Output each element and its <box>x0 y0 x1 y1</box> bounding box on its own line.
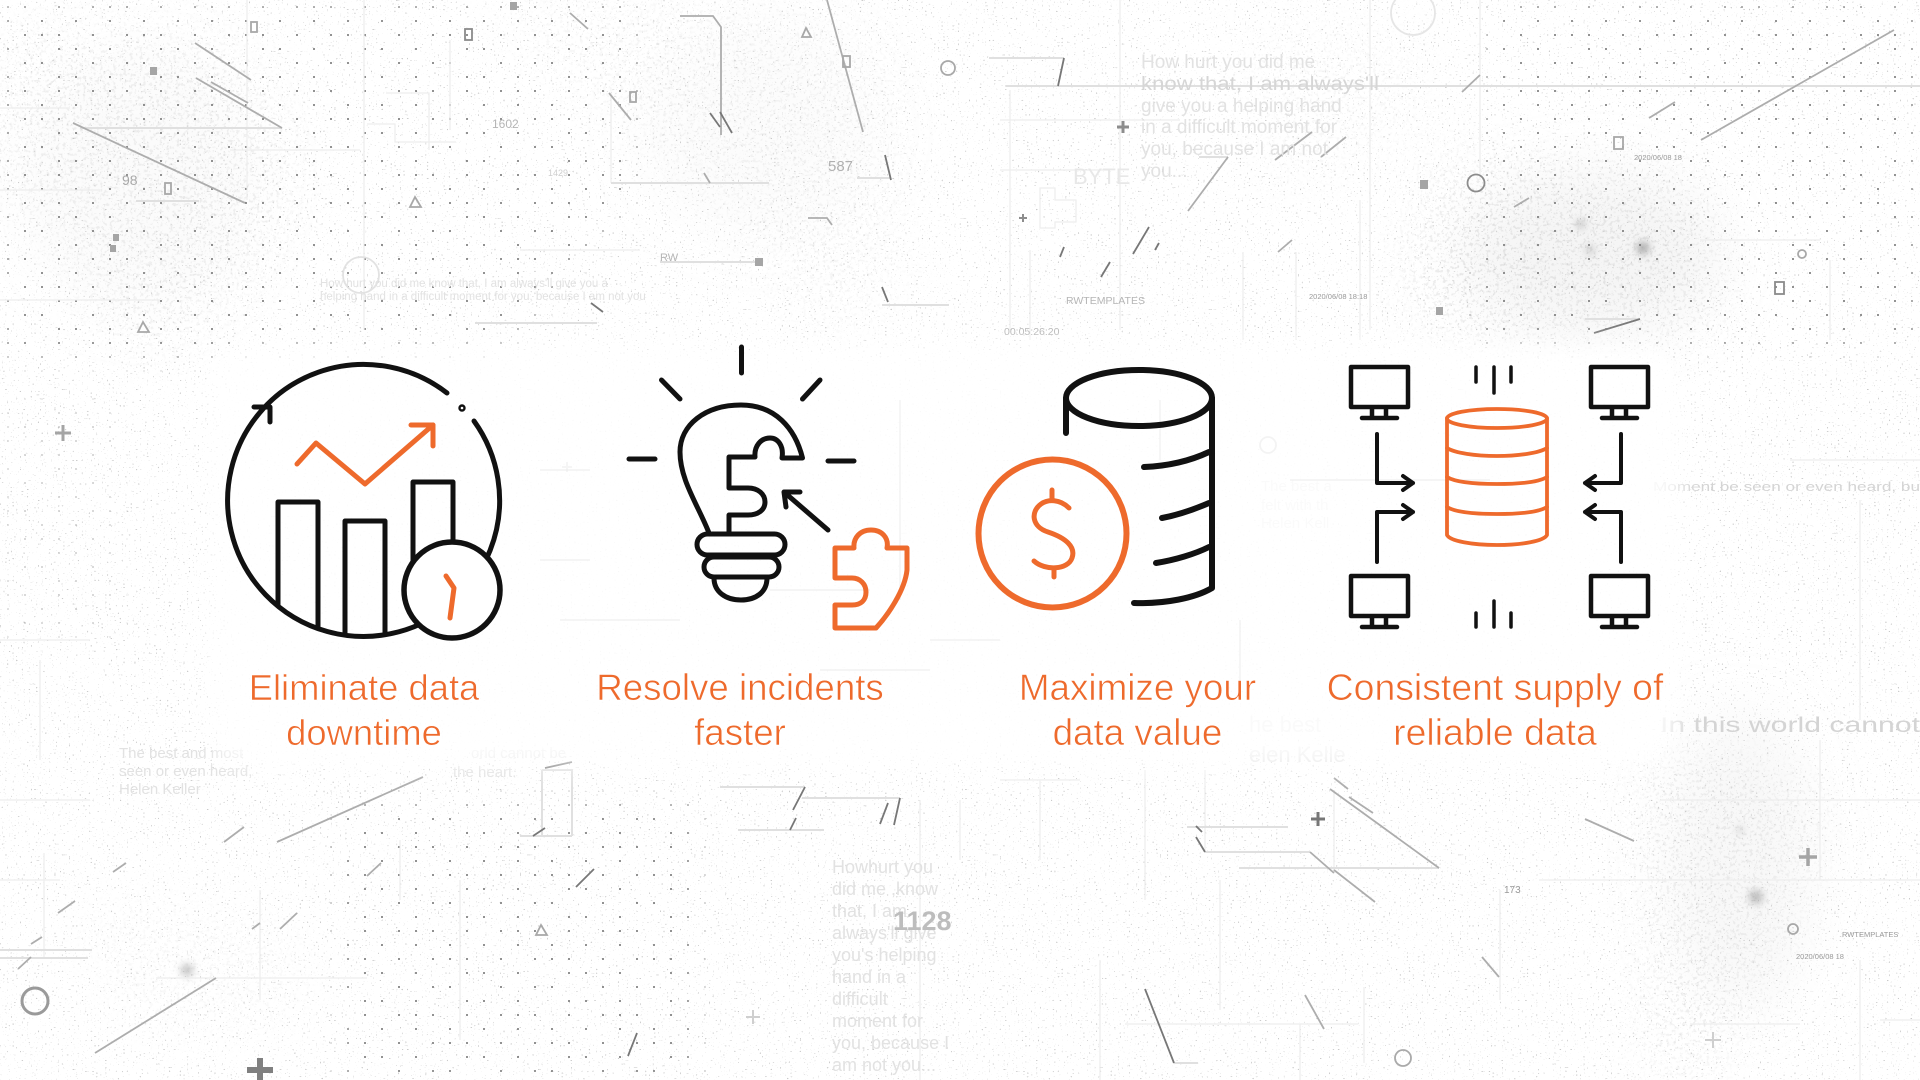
faint background text: that, I am <box>832 901 907 921</box>
foreground: icons and captions <box>225 344 1664 746</box>
small data labels: RWTEMPLATES <box>1066 295 1145 307</box>
rays <box>629 347 854 461</box>
caption: reliable data <box>1393 711 1597 753</box>
faint background text: Howhurt you <box>832 857 933 877</box>
small data labels: 1429 <box>548 168 568 178</box>
small data labels: 00:05:26:20 <box>1004 326 1060 338</box>
caption <box>1019 667 1256 753</box>
small data labels: 587 <box>828 158 853 175</box>
faint background text: orld cannot be <box>471 745 566 762</box>
faint background text: The best a <box>1261 478 1333 495</box>
dense map clusters <box>181 220 1763 976</box>
faint background text: Helen Keller <box>119 781 201 798</box>
trend arrow <box>297 425 433 484</box>
bars <box>278 482 453 640</box>
icon: chart in circle with clock <box>228 364 500 640</box>
faint background text: you, because I <box>832 1033 949 1053</box>
faint background text: BYTE <box>1073 164 1130 189</box>
caption: data value <box>1053 712 1222 753</box>
small data labels: 2020/06/08 18 <box>1634 153 1682 162</box>
caption: faster <box>694 712 786 753</box>
faint background text: moment for <box>832 1011 923 1031</box>
faint background text: seen or even heard, <box>119 763 252 780</box>
caption: Eliminate data <box>249 667 480 708</box>
icon: database and dollar coin <box>978 370 1212 608</box>
column: resolve incidents faster <box>596 347 907 753</box>
tick marks <box>1476 367 1511 627</box>
column: eliminate data downtime <box>228 364 500 753</box>
caption <box>1327 666 1664 753</box>
connector arrows <box>1377 434 1621 562</box>
small data labels: RW <box>660 252 679 264</box>
small data labels: 1128 <box>893 906 952 936</box>
caption: Consistent supply of <box>1327 666 1664 708</box>
small data labels: 1602 <box>492 117 519 131</box>
faint background text: the heart. <box>453 764 516 781</box>
column: maximize your data value <box>978 370 1256 753</box>
clock <box>404 542 500 638</box>
orange puzzle piece <box>835 530 907 628</box>
black coin stack <box>1066 370 1212 603</box>
faint lines showing through panel <box>540 400 1490 700</box>
faint background text: How hurt you did me <box>1141 52 1315 73</box>
faint background text: am not you... <box>832 1055 936 1075</box>
small data labels: 2020/06/08 18 <box>1796 952 1844 961</box>
icon: light bulb with puzzle piece <box>629 347 907 628</box>
caption: Resolve incidents <box>596 667 884 708</box>
caption: Maximize your <box>1019 667 1256 708</box>
small data labels: RWTEMPLATES <box>1842 930 1898 939</box>
faint background text: you, because I am not <box>1141 139 1329 160</box>
circular arrow ring <box>228 364 500 636</box>
small data labels: 173 <box>1504 885 1521 896</box>
faint background text: always'll give <box>832 923 936 943</box>
faint background text: you's helping <box>832 945 937 965</box>
faint background text: Moment be seen or even heard, bu <box>1653 479 1920 494</box>
faint background text: difficult <box>832 989 888 1009</box>
faint background text: you... <box>1141 161 1187 182</box>
faint background text: know that, I am always'll <box>1141 74 1379 95</box>
faint background text: helping hand in a difficult moment for you, because I am not you <box>320 291 646 303</box>
monitors <box>1351 367 1648 627</box>
faint background text: How hurt you did me know that, I am always'll give you a <box>320 278 609 290</box>
soft white panel behind the icons <box>210 345 1680 765</box>
dark accent strokes <box>533 58 1640 1063</box>
orange dollar coin <box>978 460 1126 608</box>
caption: downtime <box>286 712 442 753</box>
faint background text: give you a helping hand <box>1141 96 1342 117</box>
faint background text: did me ,know <box>832 879 939 899</box>
small data labels: 98 <box>122 172 138 188</box>
faint background text: elen Kelle <box>1249 742 1346 767</box>
faint background text: he best <box>1249 712 1321 737</box>
small data labels: 2020/06/08 18:18 <box>1309 292 1367 301</box>
faint background text: The best and most <box>119 745 244 762</box>
bulb base <box>697 534 785 600</box>
icon: monitors feeding a database <box>1351 367 1648 627</box>
caption <box>249 667 480 753</box>
bulb outline with puzzle cut-out <box>680 405 802 533</box>
faint background text: In this world cannot <box>1660 714 1920 737</box>
black arrow <box>784 492 828 530</box>
small data labels <box>122 117 1898 961</box>
column: consistent supply of reliable data <box>1327 367 1664 753</box>
caption <box>596 667 884 753</box>
faint background text: in a difficult moment for <box>1141 117 1338 138</box>
orange database cylinder <box>1447 409 1547 545</box>
faint background text: hand in a <box>832 967 907 987</box>
faint background text: Helen Kell <box>1261 515 1329 532</box>
faint background text: felt with th <box>1261 497 1329 514</box>
